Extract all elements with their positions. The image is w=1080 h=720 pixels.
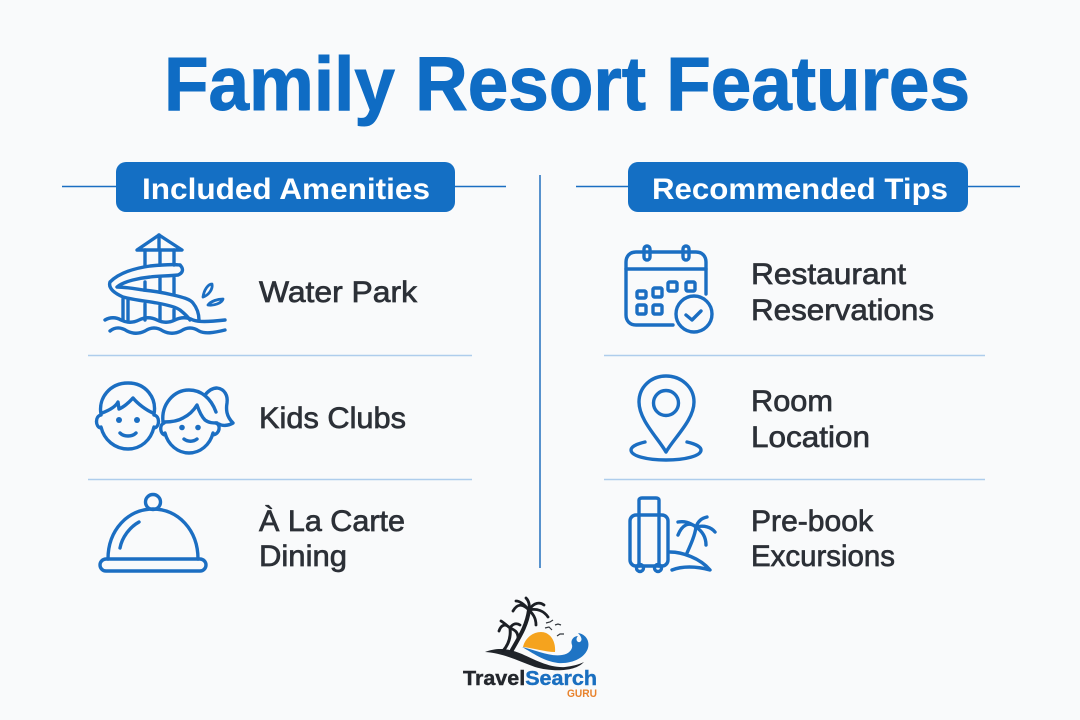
- label: restaurant reservations: Restaurant: [751, 258, 907, 291]
- label: pre-book excursions: Excursions: [751, 540, 895, 573]
- label: a la carte dining: Dining: [259, 540, 347, 573]
- logo birds: [545, 620, 564, 636]
- logo sun: [523, 632, 555, 652]
- icon: dining cloche: [100, 494, 206, 571]
- row divider: [88, 354, 472, 356]
- label: a la carte dining: À La Carte: [259, 505, 405, 538]
- heading: included amenities: Included Amenities: [142, 173, 430, 206]
- panel: included amenities: [62, 162, 506, 573]
- icon: suitcase and palm: [630, 498, 715, 572]
- label: pre-book excursions: Pre-book: [751, 505, 874, 538]
- title: Family Resort Features: [164, 42, 970, 127]
- icon: water park slide: [105, 235, 225, 333]
- logo: travel search guru: [463, 598, 597, 700]
- logo ground: [485, 649, 584, 670]
- heading: included amenities: [62, 162, 506, 212]
- logo: travel search guru: GURU: [567, 688, 597, 700]
- row divider: [604, 354, 985, 356]
- logo wordmark: TravelSearch: [463, 668, 597, 690]
- label: room location: Room: [751, 385, 833, 418]
- icon: kids faces: [96, 383, 233, 453]
- label: kids clubs: Kids Clubs: [259, 402, 406, 435]
- logo palm trees: [499, 598, 548, 651]
- icon: calendar with check: [626, 246, 712, 332]
- panel: recommended tips: [576, 162, 1020, 573]
- icon: location pin: [631, 376, 701, 460]
- heading: recommended tips: Recommended Tips: [652, 173, 948, 206]
- logo wave: [522, 633, 588, 663]
- label: room location: Location: [751, 421, 870, 454]
- label: restaurant reservations: Reservations: [751, 294, 934, 327]
- vertical divider: [539, 175, 541, 568]
- label: water park: Water Park: [259, 276, 418, 309]
- heading: recommended tips: [576, 162, 1020, 212]
